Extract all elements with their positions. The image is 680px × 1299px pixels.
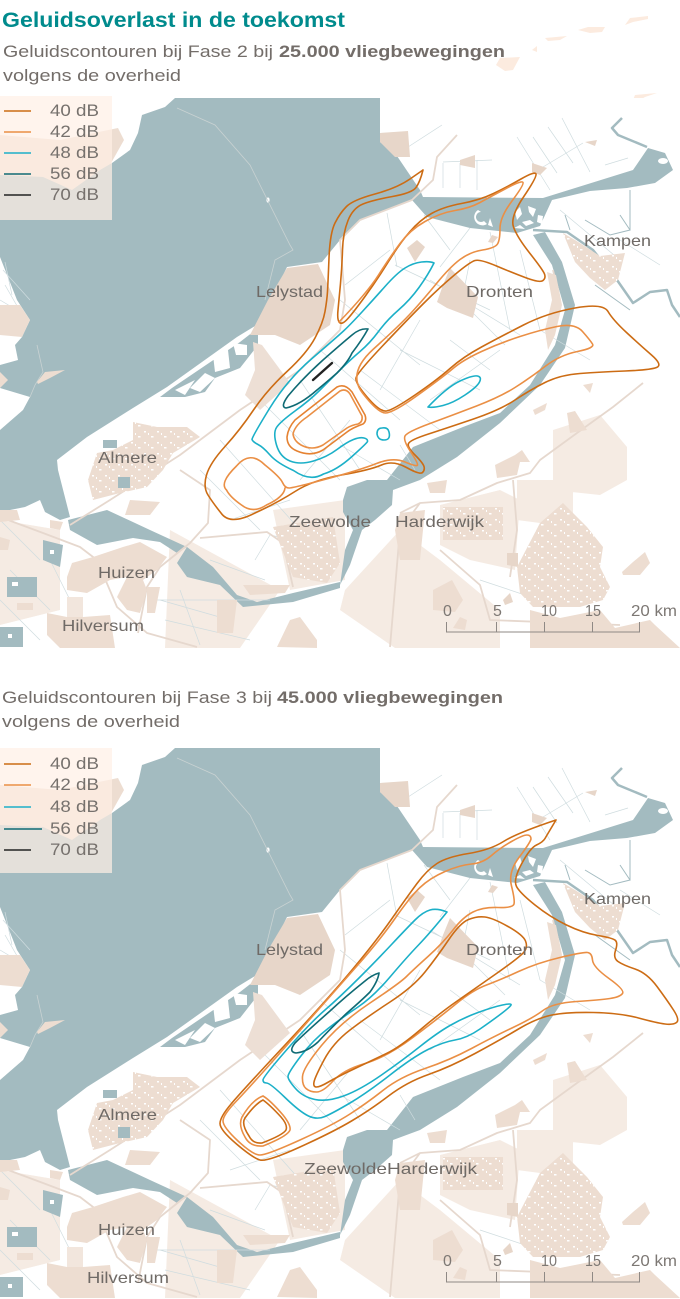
place labels fase 2: Lelystad bbox=[256, 284, 323, 301]
contour 40 dB centre bbox=[287, 386, 366, 454]
heading: fase 3: volgens de overheid bbox=[2, 712, 180, 731]
place labels fase 2 bbox=[62, 233, 651, 635]
legend fase 2 bbox=[0, 96, 112, 220]
legend fase 3 bbox=[0, 748, 112, 873]
scale bar fase 3 bbox=[443, 1253, 677, 1282]
place labels fase 2: Harderwijk bbox=[395, 514, 485, 531]
place labels fase 3: Huizen bbox=[98, 1222, 155, 1239]
heading: fase 3: 45.000 vliegbewegingen bbox=[277, 688, 503, 707]
heading: fase 3: Geluidscontouren bij Fase 3 bij bbox=[2, 688, 272, 707]
legend fase 2: 56 dB bbox=[50, 164, 99, 183]
title: Geluidsoverlast in de toekomst bbox=[2, 9, 345, 32]
heading: fase 2: Geluidscontouren bij Fase 2 bij bbox=[3, 42, 273, 61]
scale bar fase 2: 15 bbox=[585, 603, 601, 620]
contours fase 2 bbox=[205, 170, 659, 520]
place labels fase 2: Hilversum bbox=[62, 618, 144, 635]
heading: fase 3 bbox=[2, 688, 503, 731]
contour 70 dB bbox=[313, 363, 332, 380]
scale bar fase 3: 20 km bbox=[631, 1253, 677, 1270]
place labels fase 3 bbox=[87, 891, 651, 1287]
contour 40 dB bbox=[220, 820, 678, 1160]
scale bar fase 3: 5 bbox=[493, 1253, 502, 1270]
scale bar fase 3: 10 bbox=[541, 1253, 557, 1270]
place labels fase 2: Kampen bbox=[584, 233, 651, 250]
scale bar fase 2: 20 km bbox=[631, 603, 677, 620]
contour 42 dB bbox=[223, 835, 623, 1155]
contour 42 dB centre bbox=[293, 390, 362, 448]
contour 42 dB bbox=[224, 182, 593, 510]
contour 42 dB lobe bbox=[241, 1096, 290, 1146]
legend fase 2: 40 dB bbox=[50, 101, 99, 120]
panel: map fase 2 bbox=[0, 98, 680, 649]
place labels fase 3: Almere bbox=[98, 1107, 157, 1124]
place labels fase 3: Kampen bbox=[584, 891, 651, 908]
scale bar fase 2: 10 bbox=[541, 603, 557, 620]
legend fase 3: 70 dB bbox=[50, 840, 99, 859]
place labels fase 2: Dronten bbox=[466, 284, 533, 301]
legend fase 2: 48 dB bbox=[50, 143, 99, 162]
place labels fase 2: Huizen bbox=[98, 565, 155, 582]
contour 40 dB bbox=[205, 170, 659, 520]
place labels fase 2: Almere bbox=[98, 450, 157, 467]
heading: fase 2 bbox=[3, 42, 505, 85]
heading: fase 2: 25.000 vliegbewegingen bbox=[279, 42, 505, 61]
heading: fase 2: volgens de overheid bbox=[3, 66, 181, 85]
legend fase 3: 48 dB bbox=[50, 797, 99, 816]
decorative: Wadden islands bbox=[496, 16, 657, 103]
contours fase 3 bbox=[220, 820, 678, 1160]
panel: map fase 3 bbox=[0, 748, 680, 1299]
legend fase 2: 42 dB bbox=[50, 122, 99, 141]
scale bar fase 2: 0 bbox=[443, 603, 452, 620]
contour 40 dB inner bbox=[314, 917, 526, 1087]
place labels fase 2: Zeewolde bbox=[289, 514, 371, 531]
place labels fase 3: Lelystad bbox=[256, 942, 323, 959]
scale bar fase 3: 15 bbox=[585, 1253, 601, 1270]
legend fase 3: 56 dB bbox=[50, 819, 99, 838]
place labels fase 3: Harderwijk bbox=[387, 1161, 478, 1178]
contour 40 dB lobe bbox=[244, 1100, 286, 1143]
legend fase 3: 42 dB bbox=[50, 775, 99, 794]
scale bar fase 2 bbox=[443, 603, 677, 632]
contour 48 dB bbox=[252, 262, 434, 477]
contour 48 dB bbox=[263, 909, 511, 1118]
place labels fase 3: Zeewolde bbox=[304, 1161, 387, 1178]
place labels fase 3: Dronten bbox=[466, 942, 533, 959]
place labels fase 3: Hilversum bbox=[87, 1270, 169, 1287]
scale bar fase 2: 5 bbox=[493, 603, 502, 620]
contour 56 dB bbox=[292, 973, 379, 1053]
scale bar fase 3: 0 bbox=[443, 1253, 452, 1270]
legend fase 3: 40 dB bbox=[50, 754, 99, 773]
contour 56 dB bbox=[283, 329, 368, 408]
legend fase 2: 70 dB bbox=[50, 185, 99, 204]
